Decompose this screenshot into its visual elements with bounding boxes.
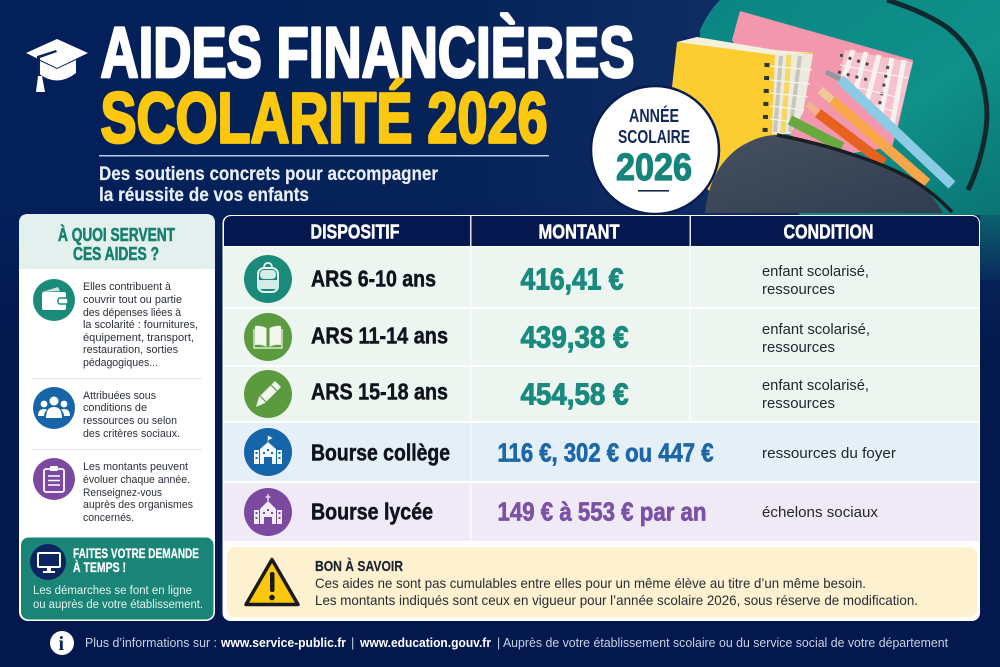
text: usage of the aid: pédagogiques... [83,357,158,369]
row: ARS 11-14 ans: enfant scolarisé, [762,322,870,338]
icon: high school [244,488,292,536]
footer: www.service-public.fr [220,635,346,650]
badge: année scolaire 2026: SCOLAIRE [618,127,690,147]
text: usage of the aid: Elles contribuent à [83,281,172,293]
table header: DISPOSITIF [310,222,400,244]
callout: bon à savoir [227,547,977,617]
text: conditions of attribution: ressources ou selon [83,415,177,427]
pouch zipper [777,135,952,212]
footer: Plus d’informations sur : [85,635,217,650]
icon: info: i [58,633,64,655]
icon: book [244,313,292,361]
row: ARS 11-14 ans: ressources [762,340,835,356]
text: amounts may change: Les montants peuvent [83,461,188,473]
footer: www.education.gouv.fr [359,635,491,650]
row: ARS 15-18 ans: enfant scolarisé, [762,378,869,394]
text: usage of the aid: la scolarité : fournitures, [83,319,198,331]
row: Bourse lycée: Bourse lycée [311,498,433,524]
row: ARS 6-10 ans: ressources [762,282,835,298]
row: ARS 11-14 ans: ARS 11-14 ans [311,322,448,348]
icon: graduation cap [26,39,88,92]
backpack body [700,0,1000,215]
subtitle: Des soutiens concrets pour accompagner [99,164,439,185]
text: usage of the aid: des dépenses liées à [83,307,182,319]
text: amounts may change [83,461,193,524]
text: conditions of attribution: conditions de [83,402,147,414]
footer: | Auprès de votre établissement scolaire ou du service social de votre département [497,635,948,650]
row: Bourse collège: ressources du foyer [762,446,896,462]
title [100,14,634,158]
pink notebook [732,11,913,155]
panel: à quoi servent ces aides [19,214,215,621]
table header: CONDITION [784,222,874,244]
callout: faites votre demande à temps: ou auprès de votre établissement. [33,599,203,611]
panel header: CES AIDES ? [73,244,159,264]
badge: année scolaire 2026 [591,86,719,214]
row: Bourse lycée: échelons sociaux [762,505,879,521]
table header [224,216,979,246]
icon: people [33,387,75,429]
text: amounts may change: Renseignez-vous [83,487,162,499]
text: usage of the aid: équipement, transport, [83,332,194,344]
icon: backpack [244,255,292,303]
callout: faites votre demande à temps: À TEMPS ! [73,560,126,575]
text: usage of the aid [83,281,198,369]
pencils [790,72,952,185]
icon: pencil [244,370,292,418]
row: ARS 6-10 ans [224,247,979,307]
row: ARS 6-10 ans: enfant scolarisé, [762,264,869,280]
text: amounts may change: concernés. [83,512,134,524]
text: usage of the aid: couvrir tout ou partie [83,294,182,306]
callout: faites votre demande à temps: FAITES VOTRE DEMANDE [73,546,199,561]
title line 1: AIDES FINANCIÈRES [100,14,634,93]
icon: monitor [30,544,66,580]
text: conditions of attribution: Attribuées sous [83,390,156,402]
illustration: backpack with notebooks and pencils [672,0,1000,215]
pink notebook spiral pages [838,50,913,130]
text: conditions of attribution [83,390,180,440]
title line 2: SCOLARITÉ 2026 [100,80,548,158]
subtitle [99,164,439,206]
row: Bourse collège [224,423,979,481]
icon: info [50,631,74,655]
row: ARS 11-14 ans [224,309,979,365]
text: amounts may change: évoluer chaque année. [83,474,190,486]
footer: | [351,635,354,650]
row: ARS 11-14 ans: 439,38 € [520,320,628,354]
subtitle: la réussite de vos enfants [99,185,309,206]
badge: année scolaire 2026: ANNÉE [629,105,679,126]
text: conditions of attribution: des critères sociaux. [83,428,180,440]
callout: faites votre demande à temps: Les démarches se font en ligne [33,585,192,597]
row: ARS 15-18 ans: 454,58 € [520,376,628,412]
icon: school [244,428,292,476]
footer [50,631,948,655]
callout: bon à savoir: BON À SAVOIR [315,558,403,575]
callout: bon à savoir: Ces aides ne sont pas cumulables entre elles pour un même élève au titre d’un même besoin. [315,575,866,591]
row: Bourse lycée: 149 € à 553 € par an [498,496,706,526]
panel header: À QUOI SERVENT [58,224,175,245]
icon: warning triangle [246,560,298,604]
row: ARS 15-18 ans: ARS 15-18 ans [311,378,448,404]
table header: MONTANT [538,222,620,244]
row: ARS 15-18 ans: ressources [762,396,835,412]
panel header [19,214,215,269]
yellow notebook spiral pages [765,54,813,134]
callout: bon à savoir: Les montants indiqués sont ceux en vigueur pour l’année scolaire 2026, sous réserve de modification. [315,592,918,608]
row: ARS 6-10 ans: ARS 6-10 ans [311,266,436,292]
badge: année scolaire 2026: 2026 [616,147,692,189]
yellow notebook [672,42,813,195]
row: Bourse collège: 116 €, 302 € ou 447 € [498,438,714,468]
row: ARS 15-18 ans [224,367,979,421]
row: Bourse collège: Bourse collège [311,440,450,466]
pencil pouch [705,135,943,213]
row: ARS 6-10 ans: 416,41 € [520,262,624,296]
text: amounts may change: auprès des organismes [83,499,193,511]
text: usage of the aid: restauration, sorties [83,344,178,356]
icon: clipboard [33,458,75,500]
backpack zipper [887,0,987,190]
icon: wallet [33,279,75,321]
panel: table of aids [222,215,980,621]
row: Bourse lycée [224,483,979,541]
yellow notebook top sheet edge [677,37,813,55]
callout: faites votre demande à temps [20,537,214,620]
